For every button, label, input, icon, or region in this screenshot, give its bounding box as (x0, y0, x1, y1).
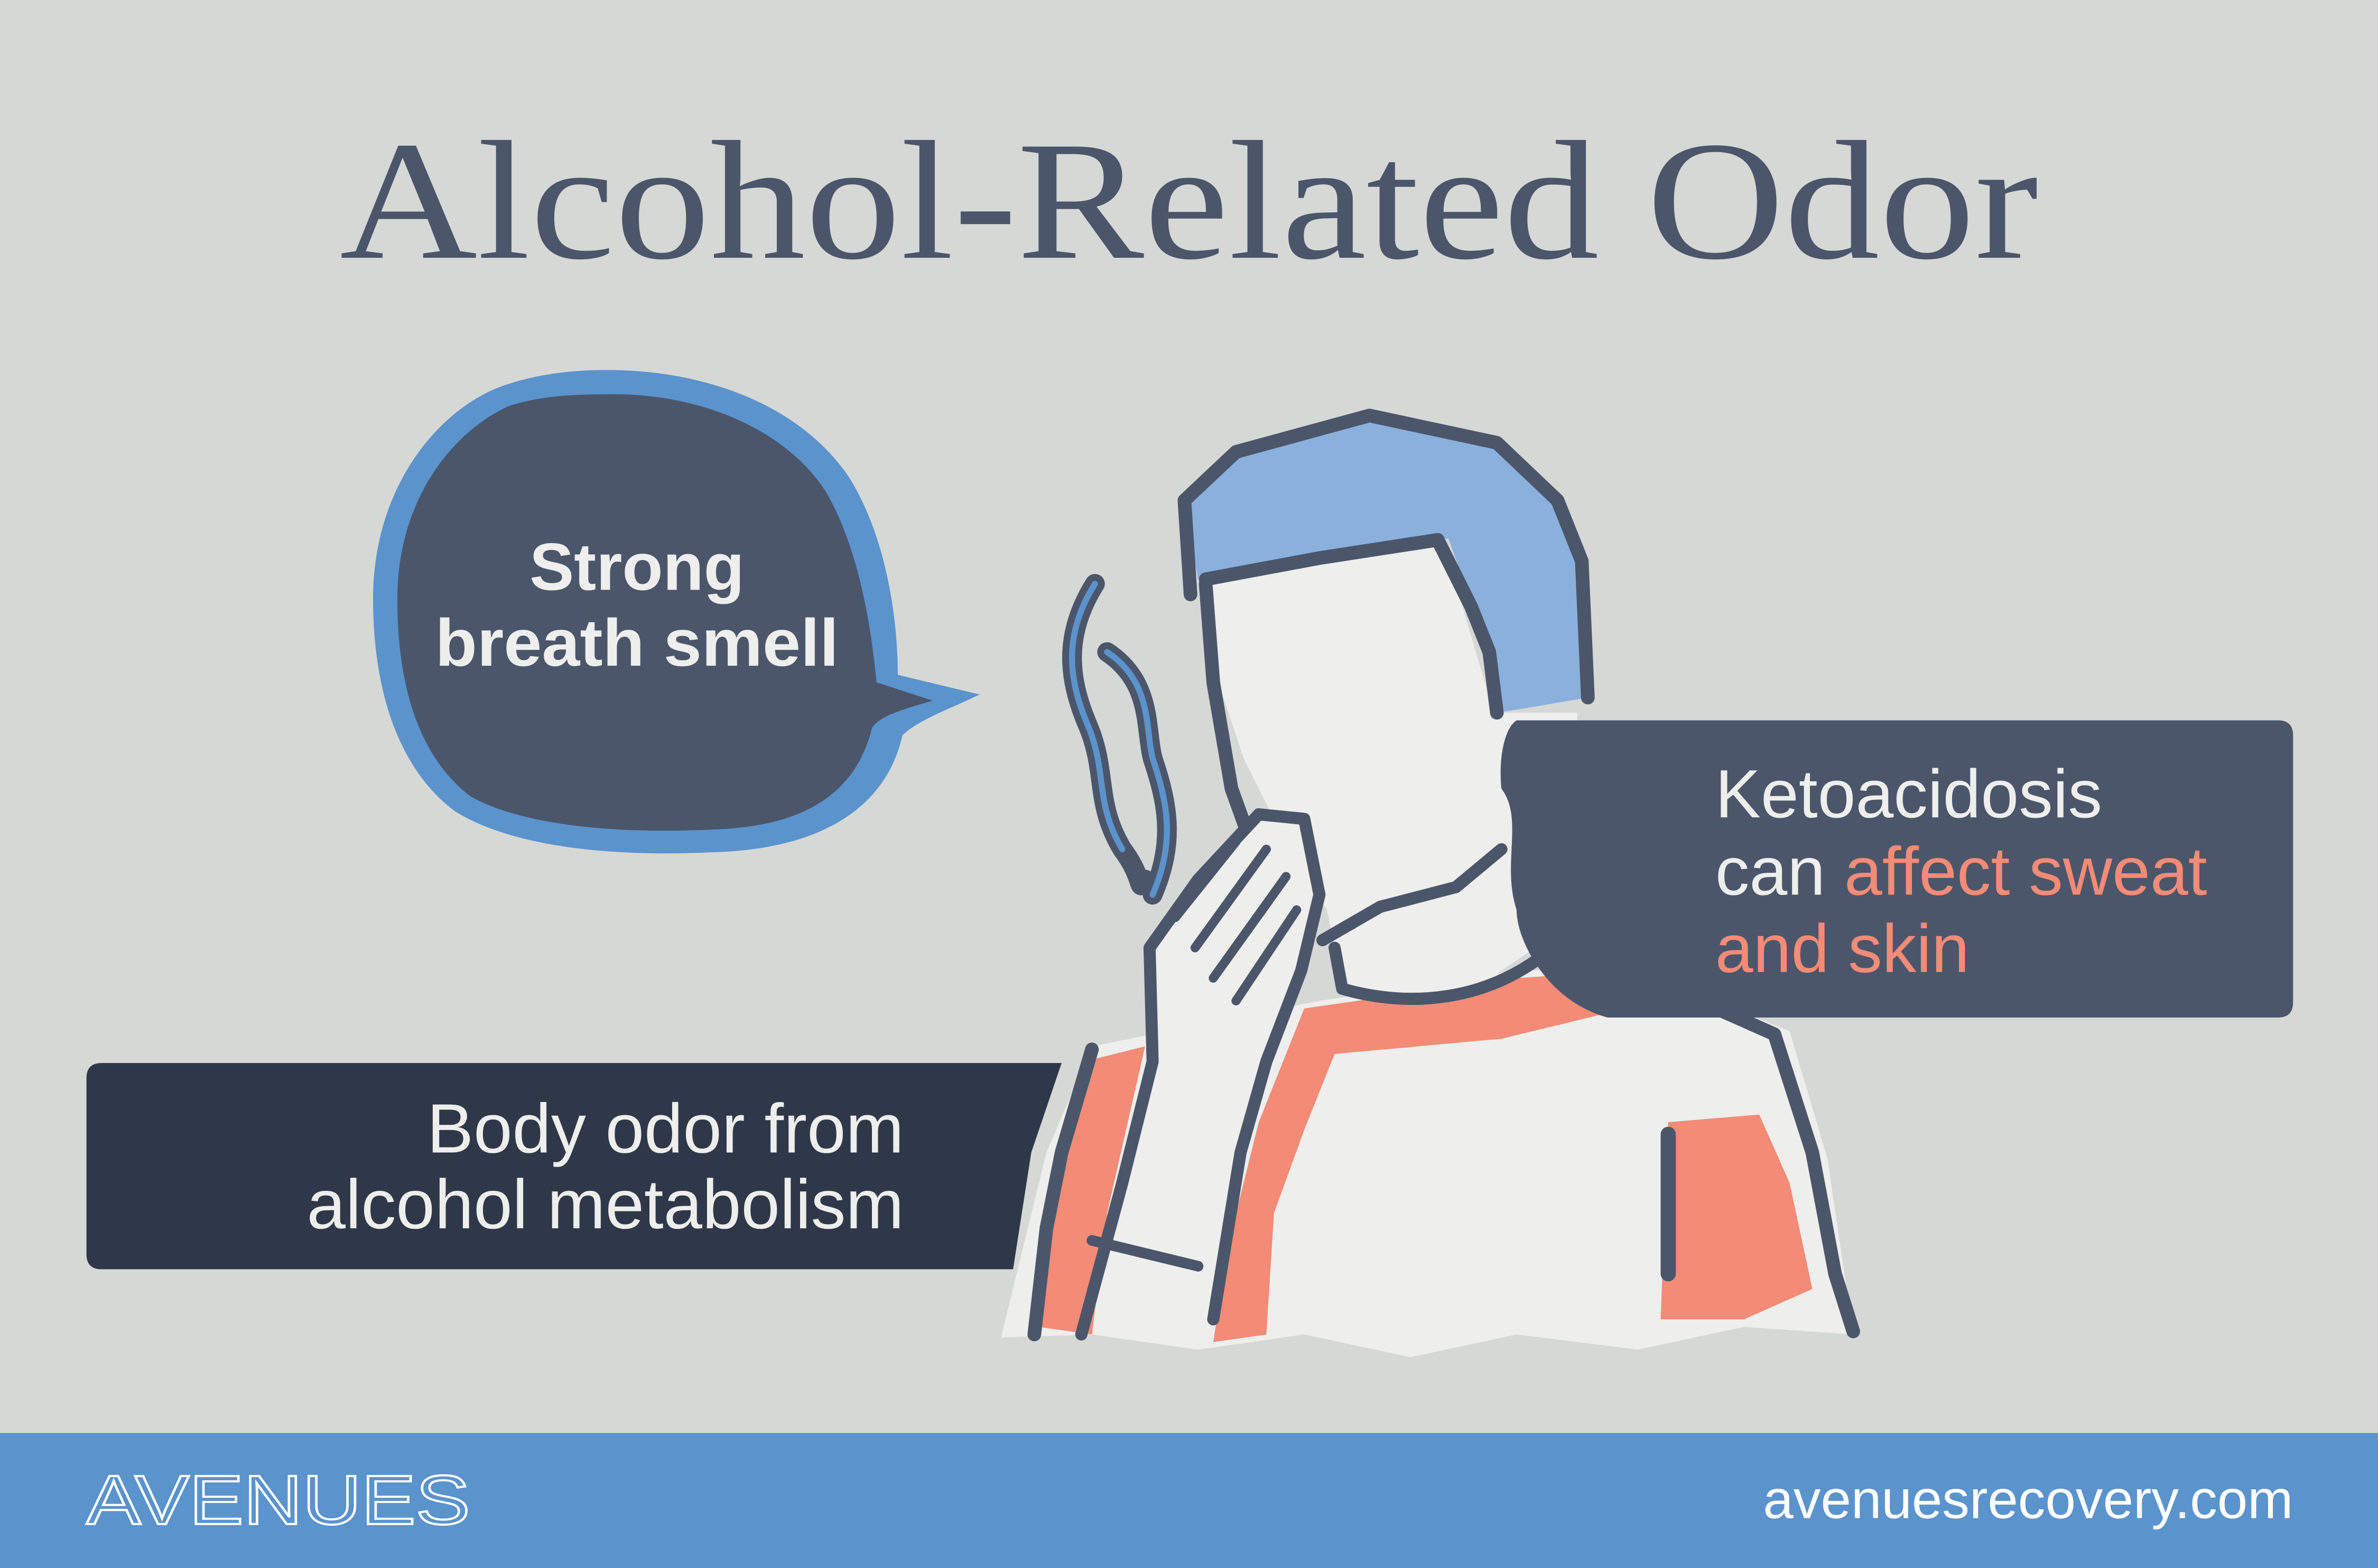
neck (1327, 864, 1547, 1001)
speech bubble: strong breath smell: Strong (530, 530, 745, 604)
callout: ketoacidosis: can affect sweat (1715, 834, 2207, 910)
face (1198, 534, 1577, 910)
callout: ketoacidosis (1501, 720, 2293, 1018)
callout: body odor: alcohol metabolism (307, 1165, 904, 1243)
hair (1184, 415, 1588, 713)
salmon shirt areas (1213, 970, 1630, 1342)
shirt outlines (1034, 1049, 1092, 1334)
speech bubble: strong breath smell: breath smell (435, 605, 839, 680)
shirt body (1001, 970, 1853, 1357)
face outline (1206, 584, 1259, 864)
callout: ketoacidosis: Ketoacidosis (1715, 756, 2102, 832)
icon: odor smoke waves (1072, 584, 1167, 895)
callout: body odor: Body odor from (427, 1089, 904, 1168)
logo: avenues: AVENUES (87, 1461, 470, 1539)
callout: ketoacidosis: and skin (1715, 911, 1970, 987)
website url: avenuesrecovery.com (1763, 1468, 2293, 1529)
person illustration (1001, 415, 1853, 1357)
speech bubble: strong breath smell (373, 370, 980, 853)
callout: body odor (87, 1063, 1062, 1270)
hand and arm (1092, 811, 1320, 1304)
footer band (0, 1433, 2378, 1568)
title: Alcohol-Related Odor (340, 107, 2038, 295)
